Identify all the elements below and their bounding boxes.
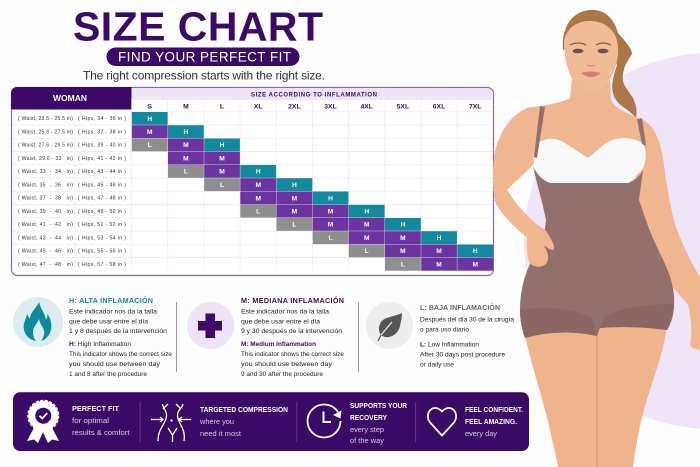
woman header: WOMAN (53, 93, 87, 103)
benefit: perfect fit: for optimal (72, 418, 109, 425)
description: you should use between day (241, 361, 333, 368)
legend: high inflammation (13, 296, 172, 378)
inflammation cells: L (328, 235, 333, 242)
inflammation cells: L (292, 222, 296, 229)
inflammation cells: L (256, 208, 260, 216)
size labels: L (220, 103, 224, 110)
description: 9 and 30 after the procedure (241, 371, 324, 378)
inflammation cells: H (328, 195, 333, 202)
inflammation cells: M (472, 262, 478, 269)
benefit: perfect fit (27, 401, 130, 443)
inflammation cells: H (220, 142, 225, 149)
inflammation cells: M (219, 156, 225, 162)
grid lines (12, 99, 493, 271)
face (564, 21, 618, 92)
lace hem (520, 304, 674, 338)
description: H: High Inflammation (69, 341, 132, 348)
inflammation cells: M (183, 156, 189, 162)
description: Este indicador nos da la talla (241, 308, 330, 316)
waist and hip measurements: ( Hips, 45 - 46 in ) (78, 182, 126, 188)
description: This indicator shows the correct size (69, 351, 172, 358)
inflammation cells: H (292, 182, 297, 189)
waist and hip measurements: ( Waist, 33 - 34 in) (18, 169, 73, 175)
benefit: perfect fit: PERFECT FIT (72, 404, 120, 413)
inflammation cells: L (220, 182, 224, 189)
description (420, 317, 515, 368)
waist and hip measurements: ( Waist, 25.6 - 27.5 in) (18, 129, 73, 135)
model figure wearing the shaper (493, 10, 700, 467)
legend: medium inflammation (187, 296, 344, 378)
waist and hip measurements: ( Hips, 41 - 42 in ) (78, 156, 126, 162)
inflammation cells: L (365, 248, 369, 255)
inflammation cells: H (184, 129, 189, 136)
neck and chest (527, 78, 651, 165)
icon: clock with arrow (308, 404, 342, 438)
header band (132, 88, 493, 100)
size chart table (11, 87, 494, 276)
size labels: M (183, 103, 189, 110)
icon: waist with arrows (151, 404, 191, 442)
benefit: targeted compression: need it most (200, 431, 241, 438)
description: L: Low Inflammation (420, 342, 480, 349)
size labels: 5XL (397, 103, 409, 110)
description: Después del día 30 de la cirugía (420, 317, 515, 324)
size labels: XL (254, 103, 263, 110)
waist and hip measurements: ( Hips, 47 - 48 in ) (78, 196, 126, 202)
woman header (11, 87, 132, 110)
heading: H: ALTA INFLAMACIÓN (69, 296, 153, 305)
heading: M: MEDIANA INFLAMACIÓN (241, 296, 344, 305)
description: M: Medium Inflammation (241, 341, 316, 348)
benefit: recovery: of the way (350, 438, 385, 445)
shaper garment (520, 166, 674, 338)
tagline: The right compression starts with the right size. (83, 68, 325, 82)
description: que debe usar entre el día (241, 318, 321, 326)
waist and hip measurements: ( Waist, 37 - 38 in) (18, 196, 73, 202)
waist and hip measurements: ( Hips, 53 - 54 in ) (78, 235, 126, 241)
waist and hip measurements: ( Waist, 27.6 - 29.5 in) (18, 143, 73, 149)
left arm (493, 107, 545, 241)
inflammation cells: M (147, 129, 153, 136)
inflammation cells (132, 112, 493, 271)
benefit: perfect fit: results & comfort (72, 430, 130, 437)
inflammation cells: H (147, 116, 152, 123)
benefit: targeted compression (151, 404, 288, 442)
description: o para uso diario (420, 327, 470, 334)
benefit: recovery: RECOVERY (350, 413, 387, 422)
description (69, 308, 172, 378)
inflammation cells: M (292, 195, 298, 202)
waist and hip measurements: ( Waist, 41 - 42 in) (18, 222, 73, 228)
waist and hip measurements: ( Waist, 35 - 36 in) (18, 182, 73, 188)
description: 1 y 8 después de la intervención (69, 328, 168, 335)
inflammation cells: M (328, 208, 334, 216)
waist and hip measurements: ( Hips, 34 - 36 in ) (78, 116, 126, 122)
inflammation cells: L (148, 142, 152, 149)
inflammation cells: M (400, 248, 406, 255)
inflammation cells: M (364, 235, 370, 242)
legs (525, 320, 667, 467)
size labels: 4XL (360, 103, 373, 110)
icon: rosette (27, 401, 59, 443)
inflammation cells: M (292, 208, 298, 216)
description: you should use between day (69, 361, 161, 368)
inflammation cells: M (436, 248, 442, 255)
benefit: recovery (308, 401, 408, 445)
decorative lilac circle (524, 53, 700, 429)
description: After 30 days post procedure (420, 352, 506, 358)
size labels (147, 103, 481, 110)
inflammation cells: M (364, 222, 370, 229)
description: que debe usar entre el día (69, 318, 149, 326)
waist and hip measurements: ( Hips, 43 - 44 in ) (78, 169, 126, 175)
inflammation cells: H (437, 235, 442, 242)
benefit: feel confident: FEEL CONFIDENT. (465, 405, 523, 414)
description: or daily use (420, 362, 455, 368)
waist and hip measurements: ( Waist, 45 - 46 in) (18, 248, 73, 254)
size labels: 6XL (433, 103, 445, 110)
waist and hip measurements: ( Waist, 43 - 44 in) (18, 235, 73, 241)
inflammation cells: M (255, 195, 261, 202)
waist and hip measurements: ( Hips, 55 - 56 in ) (78, 248, 126, 254)
description: 1 and 8 after the procedure (69, 371, 148, 378)
hand on hip (527, 228, 554, 267)
waist and hip measurements: ( Waist, 47 - 48 in) (18, 262, 73, 268)
description: This indicator shows the correct size (241, 351, 344, 358)
facial features (570, 43, 611, 77)
description: Este indicador nos da la talla (69, 308, 158, 316)
icon: plus (187, 302, 234, 349)
benefit: feel confident: FEEL AMAZING. (465, 417, 517, 426)
inflammation cells: M (183, 142, 189, 149)
title: SIZE CHART (73, 4, 323, 50)
waist and hip measurements (18, 116, 126, 268)
inflammation cells: H (473, 248, 478, 255)
waist and hip measurements: ( Hips, 51 - 52 in ) (78, 222, 126, 228)
header band: SIZE ACCORDING TO INFLAMMATION (251, 92, 377, 98)
hair back (563, 10, 637, 118)
subtitle pill: FIND YOUR PERFECT FIT (118, 50, 291, 64)
legend: low inflammation (366, 302, 515, 368)
waist and hip measurements: ( Waist, 29.6 - 32 in) (18, 156, 73, 162)
benefit: feel confident (428, 405, 523, 438)
white bra (534, 138, 646, 183)
right arm (636, 118, 700, 351)
inflammation cells: L (184, 169, 188, 176)
waist and hip measurements: ( Hips, 57 - 58 in ) (78, 262, 126, 268)
benefits bar (13, 392, 529, 451)
inflammation cells: L (401, 262, 405, 269)
icon: leaf (366, 302, 413, 349)
size labels: 7XL (469, 103, 481, 110)
icon: heart (428, 408, 456, 436)
waist and hip measurements: ( Hips, 49 - 50 in ) (78, 209, 126, 215)
description: 9 y 30 después de la intervención (241, 328, 343, 335)
waist and hip measurements: ( Hips, 39 - 40 in ) (78, 143, 126, 149)
waist and hip measurements: ( Hips, 37 - 38 in ) (78, 129, 126, 135)
benefit: feel confident: every day (465, 431, 498, 438)
inflammation cells: H (256, 169, 261, 176)
benefit: targeted compression: where you (199, 419, 234, 426)
icon: flame (13, 297, 63, 347)
waist and hip measurements: ( Waist, 23.5 - 25.5 in) (18, 116, 73, 122)
size labels: S (147, 103, 152, 110)
benefit: recovery: every step (350, 427, 384, 434)
benefit: recovery: SUPPORTS YOUR (350, 401, 408, 410)
inflammation cells: M (255, 182, 261, 189)
inflammation cells: M (436, 262, 442, 269)
straps (534, 106, 646, 158)
benefit: targeted compression: TARGETED COMPRESSION (200, 405, 288, 414)
waist and hip measurements: ( Waist, 39 - 40 in) (18, 209, 73, 215)
size labels: 3XL (324, 103, 337, 110)
description (241, 308, 344, 378)
inflammation cells: M (328, 222, 334, 229)
inflammation cells: H (364, 208, 369, 216)
heading: L: BAJA INFLAMACIÓN (420, 303, 500, 312)
inflammation cells: H (401, 222, 406, 229)
inflammation cells: M (400, 235, 406, 242)
size labels: 2XL (288, 103, 301, 110)
inflammation cells: M (219, 169, 225, 176)
